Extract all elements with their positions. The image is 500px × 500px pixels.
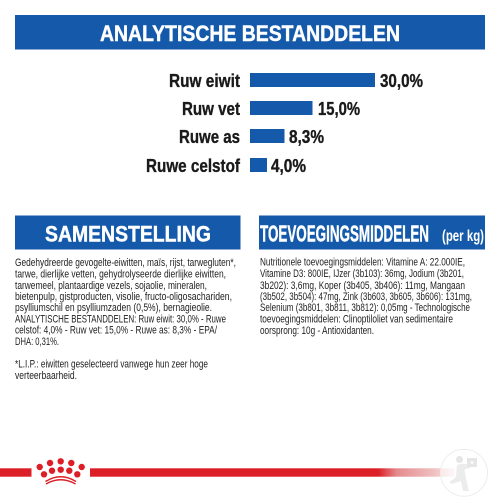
row: ruw vet: 15,0% [318,99,360,119]
row: ruw vet: Ruw vet [182,99,240,119]
row: ruw eiwit: Ruw eiwit [169,71,240,91]
row: ruw vet [182,99,360,119]
row: ruw eiwit: 30,0% [380,71,423,91]
text block: samenstelling ingredients: DHA: 0,31%. [15,336,59,348]
text block: samenstelling ingredients [15,257,236,348]
icon: watermark circle with figure [440,449,488,496]
row: ruw eiwit [169,71,423,91]
text block: samenstelling ingredients: celstof: 4,0% - Ruw vet: 15,0% - Ruwe as: 8,3% - EPA/ [15,324,218,336]
text block: L.I.P. footnote [15,358,208,382]
row: ruwe celstof: 4,0% [271,156,306,176]
row: ruwe celstof: Ruwe celstof [146,156,241,176]
text block: samenstelling ingredients: tarwe, dierlijke vetten, gehydrolyseerde dierlijke eiwitten, [15,268,226,280]
icon: royal canin crown [36,458,85,484]
panel: samenstelling heading: SAMENSTELLING [45,222,211,247]
panel: analytische bestanddelen heading [15,15,485,50]
panel: toevoegingsmiddelen heading: (per kg) [442,228,484,245]
text block: samenstelling ingredients: Gedehydreerde gevogelte-eiwitten, maïs, rijst, tarwegluten*, [15,257,236,269]
row: ruwe celstof [146,156,306,176]
text block: samenstelling ingredients: psylliumschil en psylliumzaden (0,5%), bernagieolie. [15,302,212,314]
text block: L.I.P. footnote: verteerbaarheid. [15,370,77,382]
text block: samenstelling ingredients: bietenpulp, gistproducten, visolie, fructo-oligosachariden, [15,291,232,303]
panel: samenstelling heading [15,216,240,250]
row: ruwe as [179,127,324,147]
panel: analytische bestanddelen heading: ANALYTISCHE BESTANDDELEN [100,21,400,46]
text block: samenstelling ingredients: ANALYTISCHE BESTANDDELEN: Ruw eiwit: 30,0% - Ruwe [15,314,226,326]
bar chart: analytical constituents [146,71,423,176]
footer red line [0,468,455,477]
text block: toevoegingsmiddelen details: oorsprong: 10g - Antioxidanten. [260,325,374,337]
row: ruwe as: Ruwe as [179,127,240,147]
text block: samenstelling ingredients: tarwemeel, plantaardige vezels, sojaolie, mineralen, [15,280,207,292]
text block: L.I.P. footnote: *L.I.P.: eiwitten geselecteerd vanwege hun zeer hoge [15,358,208,370]
row: ruwe as: 8,3% [289,127,324,147]
text block: toevoegingsmiddelen details [260,256,472,337]
